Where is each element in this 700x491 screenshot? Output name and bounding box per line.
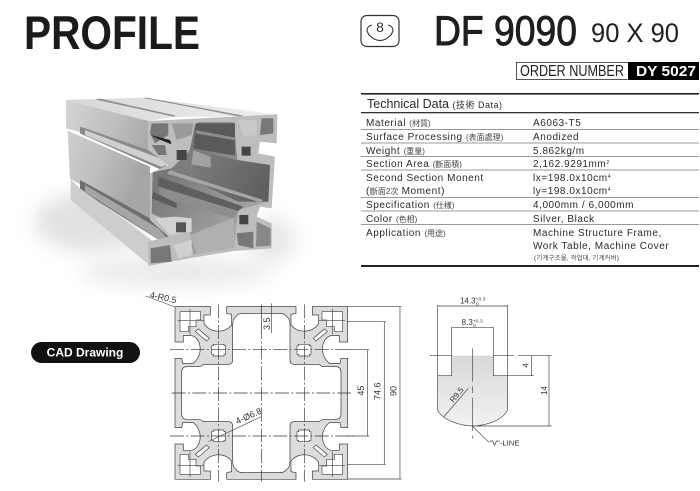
callout: 4-Ø6.8: 4-Ø6.8: [234, 406, 263, 426]
dimension: 14: 14: [540, 386, 549, 395]
dimension: 8.3: +0.3: [473, 318, 483, 324]
dimension: 14.3: 0: [476, 301, 479, 307]
row: application: (기계구조물, 작업대, 기계커버): [534, 254, 619, 262]
CAD Drawing pill label: CAD Drawing: [47, 346, 123, 360]
profile section shape: [175, 307, 348, 479]
row: material: Material (材質): [366, 118, 431, 129]
row: second section moment: lx=198.0x10cm: [533, 173, 608, 184]
row: section area: Section Area (斷面積): [366, 159, 462, 170]
dimension: 74.6: 74.6: [373, 382, 383, 400]
heading: model name DF 9090: DF 9090: [434, 7, 577, 54]
CAD drawing: cross-section with dimensions: [146, 290, 402, 482]
panel: technical data table: [361, 93, 699, 267]
label: V-LINE: "V"-LINE: [489, 438, 519, 447]
left face lower rib and band: [80, 180, 170, 242]
row: section area: [366, 159, 610, 170]
row: specification: Specification (仕樣): [366, 200, 455, 211]
row: weight: [366, 146, 585, 157]
order number badge: ORDER NUMBER: [520, 63, 624, 80]
icon: slot size 8: 8: [376, 19, 384, 35]
row: second section moment: Second Section Monent: [366, 173, 484, 184]
row: section area: 2,162.9291mm: [533, 159, 606, 170]
dimension: R9.5: R9.5: [448, 385, 466, 404]
row: second section moment: [366, 173, 611, 197]
dimension: 8.3: 0: [473, 323, 476, 329]
row: weight: 5.862kg/m: [533, 146, 585, 157]
row: second section moment: 4: [608, 174, 611, 180]
dimension: 4: 4: [522, 363, 531, 368]
row: color: [366, 214, 595, 225]
title: PROFILE: PROFILE: [24, 6, 200, 59]
row: application: Work Table, Machine Cover: [533, 241, 669, 252]
dimension: 3.5: 3.5: [262, 317, 272, 330]
row: second section moment: ly=198.0x10cm: [533, 186, 608, 197]
row: application: Machine Structure Frame,: [533, 228, 662, 239]
central cavity: [152, 122, 270, 254]
row: application: Application (用途): [366, 228, 446, 239]
CAD Drawing pill label: [31, 342, 140, 363]
floor shadow under profile: [35, 192, 296, 288]
left face middle panel with rib: [80, 127, 168, 170]
T-slot detail drawing: [430, 296, 552, 447]
front face: [148, 114, 277, 266]
callout: 4-Ø6.8: [208, 406, 263, 442]
row: surface processing: [366, 132, 579, 143]
top face: [66, 98, 277, 121]
dimension: 45: 45: [356, 386, 366, 396]
row: color: Color (色相): [366, 214, 418, 225]
row: section area: 2: [606, 160, 610, 166]
row: surface processing: Anodized: [533, 132, 579, 143]
heading: size 90 X 90: 90 X 90: [591, 18, 679, 48]
row: weight: Weight (重量): [366, 146, 425, 157]
heading: Technical Data: Technical Data (技術 Data): [367, 97, 502, 111]
order number badge: DY 5027: [636, 64, 696, 80]
left face upper band: [66, 100, 148, 150]
row: specification: 4,000mm / 6,000mm: [533, 200, 634, 211]
row: surface processing: Surface Processing (表面處理): [366, 132, 504, 143]
row: specification: [366, 200, 634, 211]
row: material: [366, 118, 581, 129]
corner holes: [150, 123, 168, 143]
row: color: Silver, Black: [533, 214, 595, 225]
dimension: 14.3: 14.3: [460, 296, 476, 305]
dimension: 14.3: +0.3: [476, 297, 486, 303]
3D aluminium profile render: [66, 98, 277, 266]
callout: 4-R0.5: 4-R0.5: [149, 290, 177, 305]
row: application: [366, 228, 669, 262]
order number badge: [516, 62, 699, 80]
row: material: A6063-T5: [533, 118, 581, 129]
icon: slot size 8: [361, 16, 399, 46]
row: second section moment: 4: [608, 187, 611, 193]
dimension: 8.3: 8.3: [462, 318, 473, 327]
dimension: 90: 90: [389, 386, 399, 396]
row: second section moment: (斷面2次 Moment): [366, 186, 445, 197]
